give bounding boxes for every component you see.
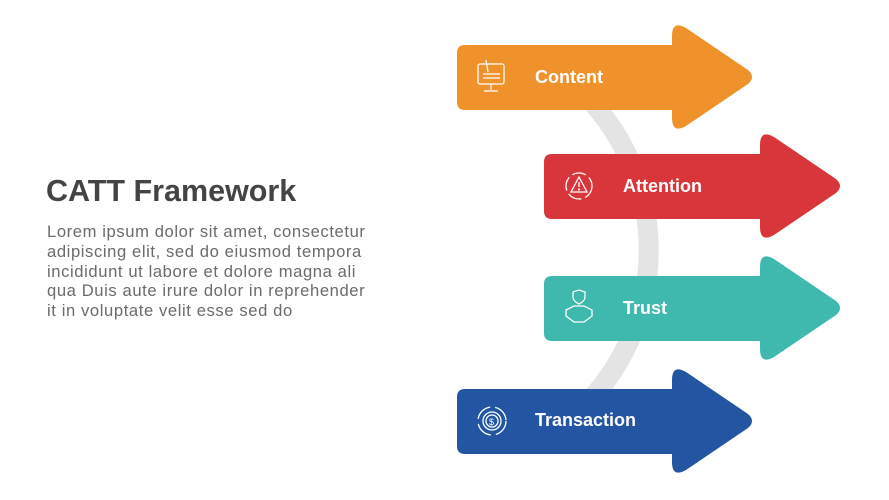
text block: description: adipiscing elit, sed do eiusmod tempora [47, 242, 362, 261]
arrow: Trust: Trust [623, 298, 667, 318]
arrow: Trust [544, 256, 840, 360]
icon: warning [566, 173, 592, 199]
arrow: Attention: Attention [623, 176, 702, 196]
text block: description: incididunt ut labore et dolore magna ali [47, 262, 356, 281]
title: CATT Framework [46, 174, 296, 208]
text block: description [47, 222, 366, 320]
arrow: Content [457, 25, 752, 129]
arrow: Content: Content [535, 67, 603, 87]
icon: money cycle [478, 407, 506, 435]
arrow: Transaction: Transaction [535, 410, 636, 430]
arrow: Attention [544, 134, 840, 238]
arrow: Transaction [457, 369, 752, 473]
text block: description: it in voluptate velit esse sed do [47, 301, 293, 320]
text block: description: Lorem ipsum dolor sit amet, consectetur [47, 222, 366, 241]
text block: description: qua Duis aute irure dolor in reprehender [47, 281, 365, 300]
icon: monitor [478, 60, 504, 91]
icon: money cycle: $ [489, 417, 494, 427]
connector arc [590, 100, 649, 400]
icon: handshake [566, 290, 592, 322]
